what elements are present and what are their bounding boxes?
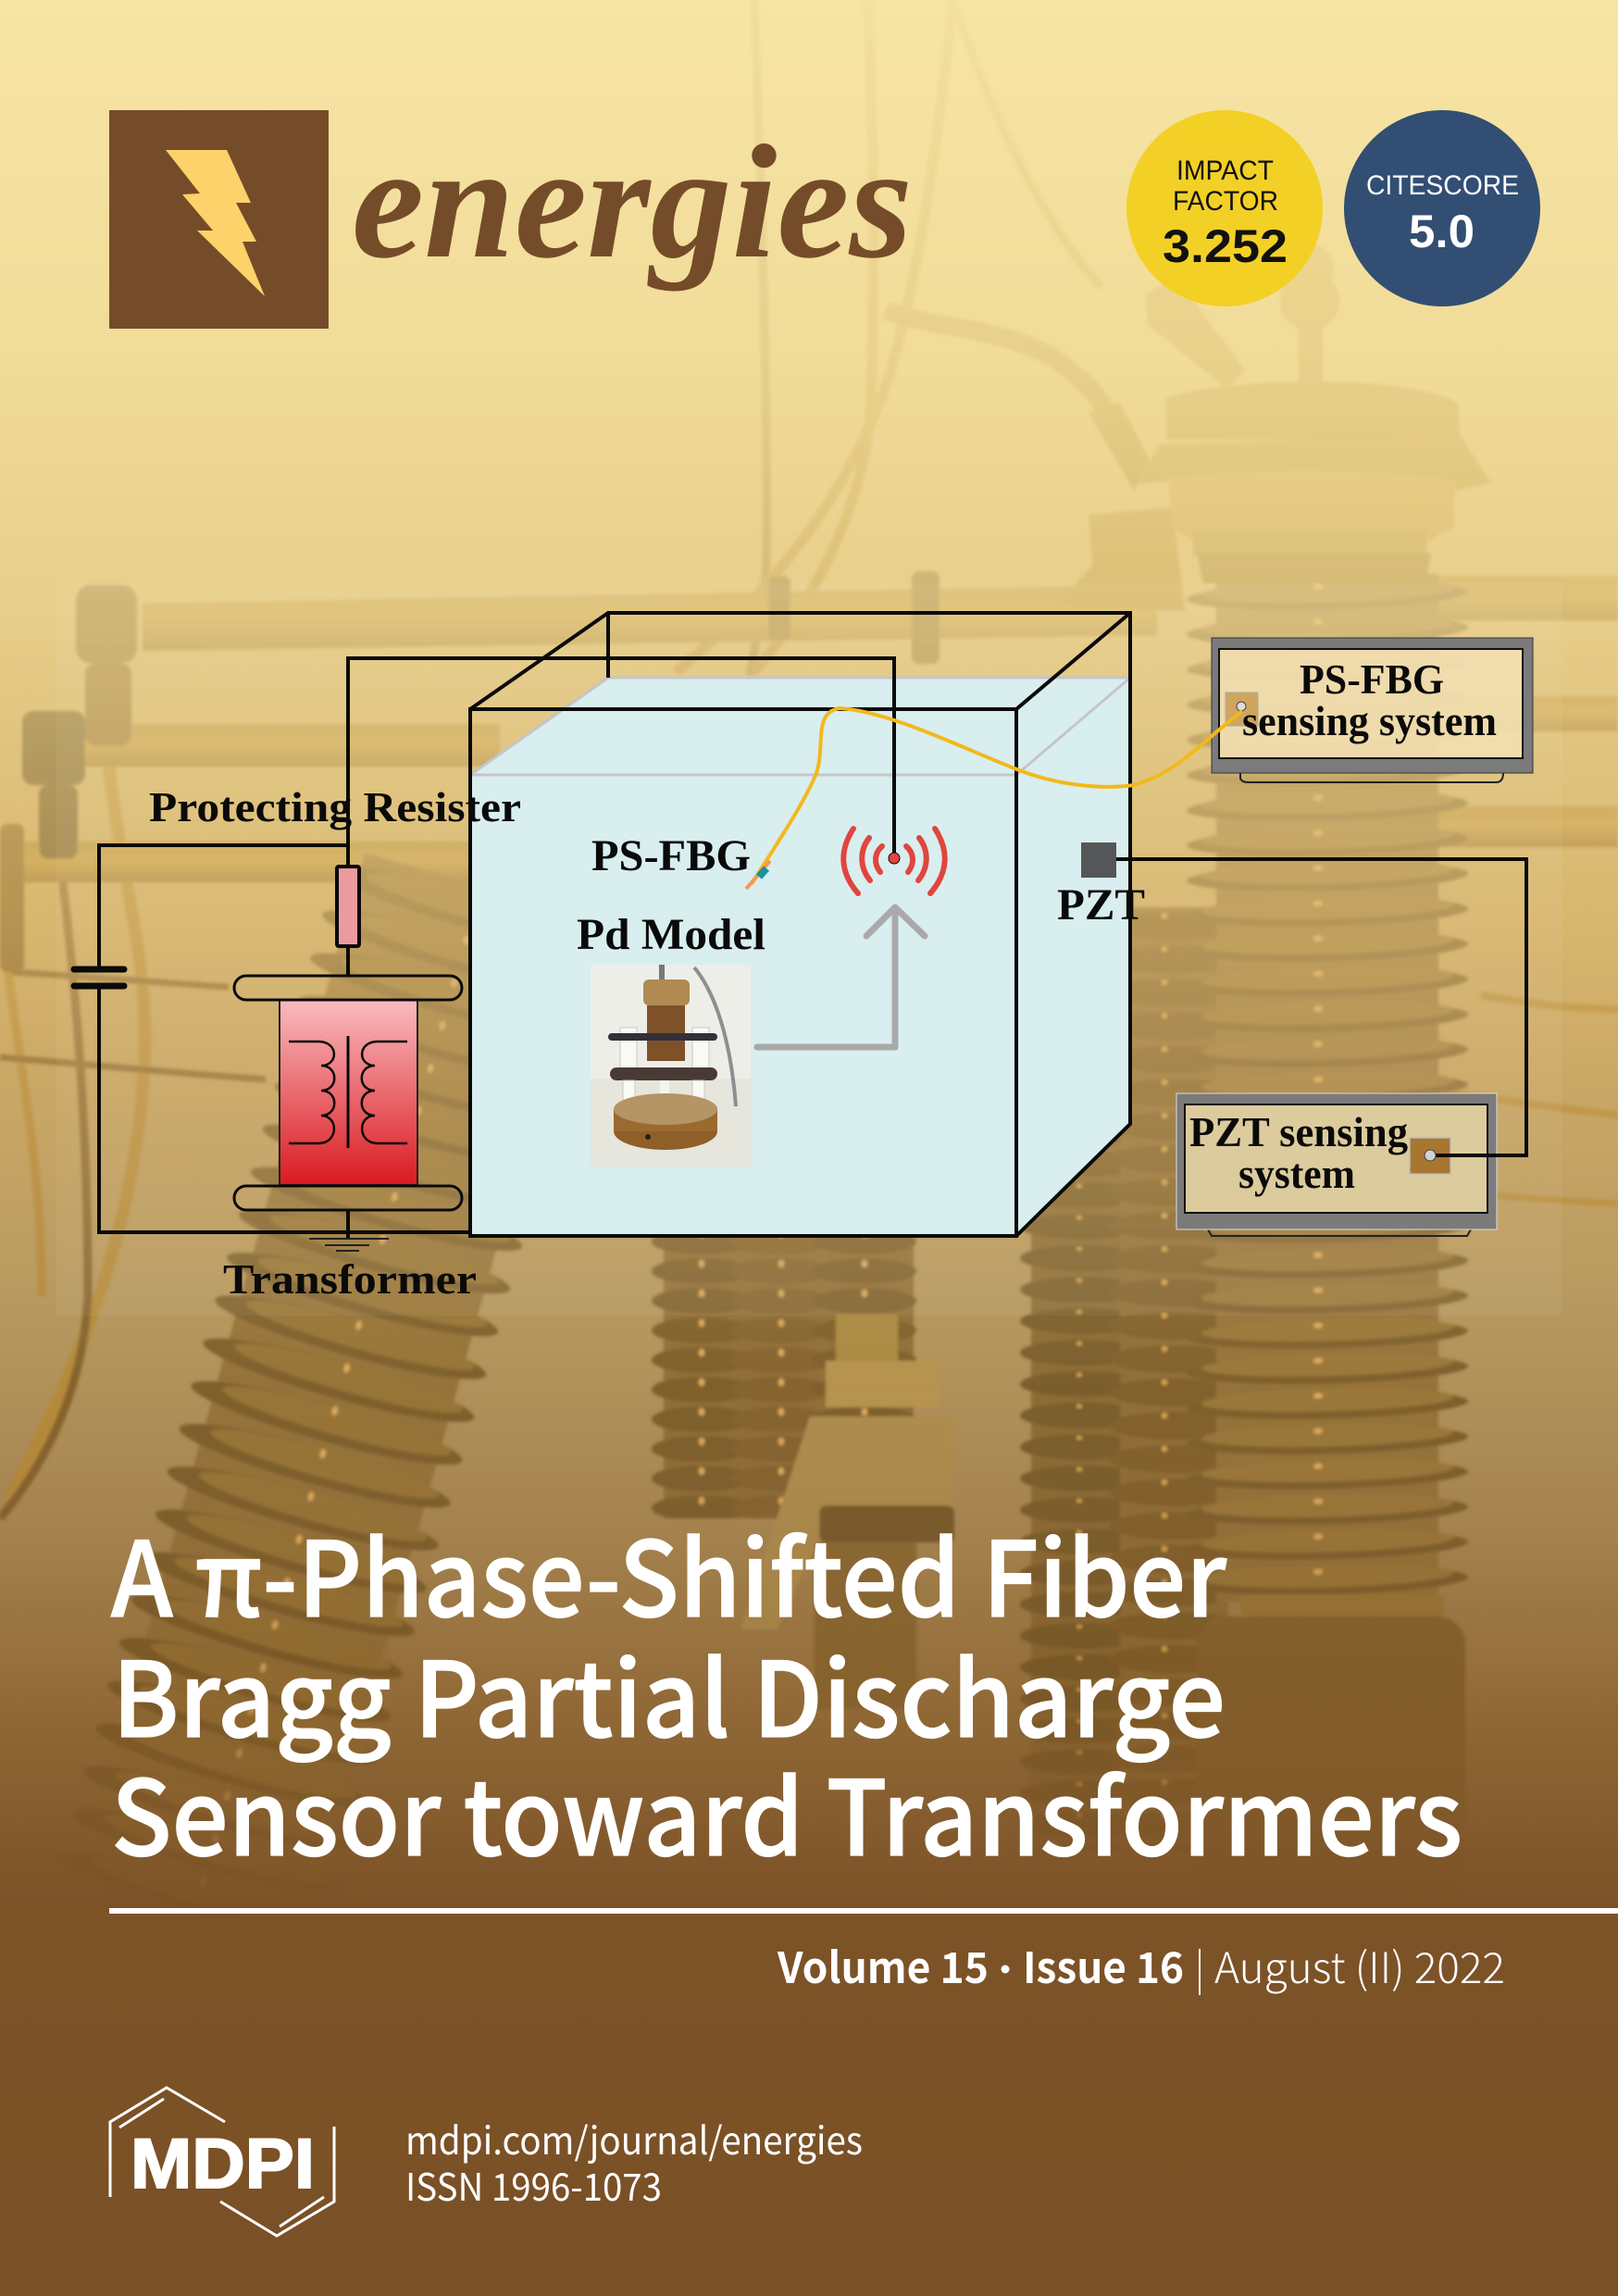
cap pin and knobs bbox=[1299, 330, 1323, 381]
journal URL and ISSN: mdpi.com/journal/energies bbox=[405, 2110, 863, 2165]
water tank fill bbox=[470, 678, 1130, 1236]
badge: citescore: 5.0 bbox=[1409, 206, 1475, 257]
logo: energies lightning square bbox=[109, 110, 329, 329]
capacitor bbox=[74, 969, 124, 986]
protecting resistor bbox=[337, 867, 359, 946]
Pd model photo bbox=[591, 965, 751, 1167]
issue line bbox=[777, 1935, 1505, 1996]
bushing rear bbox=[1018, 926, 1148, 1852]
issue line: August (II) 2022 bbox=[1214, 1935, 1505, 1996]
title: Bragg Partial Discharge bbox=[112, 1617, 1226, 1767]
circuit wiring bbox=[99, 658, 1526, 1239]
label: Pd Model: Pd Model bbox=[577, 910, 765, 959]
cap top bbox=[1166, 381, 1460, 440]
ground symbol bbox=[309, 1239, 389, 1251]
monitor: PZT sensing system: system bbox=[1238, 1150, 1355, 1197]
clamp bbox=[1089, 403, 1151, 491]
badge: impact factor bbox=[1126, 110, 1323, 306]
badge: impact factor: IMPACT bbox=[1176, 156, 1274, 186]
monitor: PS-FBG sensing system bbox=[1212, 638, 1533, 782]
label: PZT: PZT bbox=[1057, 880, 1145, 930]
badge: citescore bbox=[1344, 110, 1540, 306]
monitor: PS-FBG sensing system: PS-FBG bbox=[1300, 655, 1444, 703]
icon: discharge waves bbox=[843, 829, 945, 893]
title: A π-Phase-Shifted Fiber bbox=[111, 1497, 1227, 1647]
bushing middle bbox=[1111, 906, 1228, 1818]
arrow: signal path bbox=[757, 907, 925, 1047]
pipes bbox=[0, 576, 1618, 882]
title rule bbox=[109, 1908, 1618, 1914]
monitor: PS-FBG sensing system: sensing system bbox=[1242, 697, 1497, 744]
journal name: energies bbox=[352, 112, 913, 293]
cables upper bbox=[0, 0, 1618, 1518]
badge: citescore: CITESCORE bbox=[1366, 170, 1519, 201]
rear cap bbox=[1076, 507, 1185, 611]
badge: impact factor: 3.252 bbox=[1163, 220, 1288, 272]
badge: impact factor: FACTOR bbox=[1173, 186, 1278, 217]
tank outline bbox=[470, 613, 1130, 1236]
journal URL and ISSN bbox=[405, 2110, 863, 2212]
label: PS-FBG: PS-FBG bbox=[591, 831, 751, 880]
label: protecting resister: Protecting Resister bbox=[149, 783, 521, 830]
bushing right bbox=[1076, 246, 1490, 1769]
issue line: Issue 16 bbox=[1023, 1935, 1184, 1996]
bushing centre bbox=[650, 1238, 955, 1708]
monitor: PZT sensing system: PZT sensing bbox=[1189, 1108, 1408, 1155]
MDPI logo bbox=[110, 2088, 334, 2236]
PS-FBG sensor tip bbox=[746, 861, 770, 889]
optical fibre bbox=[752, 708, 1242, 884]
transformer bbox=[234, 976, 462, 1210]
journal URL and ISSN: ISSN 1996-1073 bbox=[405, 2156, 662, 2212]
bushing left bbox=[85, 854, 523, 1883]
MDPI logo: MDPI bbox=[131, 2125, 315, 2203]
title bbox=[111, 1497, 1462, 1886]
label: transformer: Transformer bbox=[223, 1255, 477, 1303]
clamps bbox=[0, 571, 940, 972]
PZT sensor bbox=[1081, 842, 1116, 878]
issue line: Volume 15 bbox=[777, 1935, 989, 1996]
diagram: experimental setup bbox=[74, 613, 1533, 1303]
faint backing panel behind the diagram bbox=[56, 583, 1562, 1316]
title: Sensor toward Transformers bbox=[111, 1736, 1462, 1886]
water surface lines bbox=[470, 678, 1130, 775]
monitor: PZT sensing system bbox=[1176, 1093, 1526, 1236]
